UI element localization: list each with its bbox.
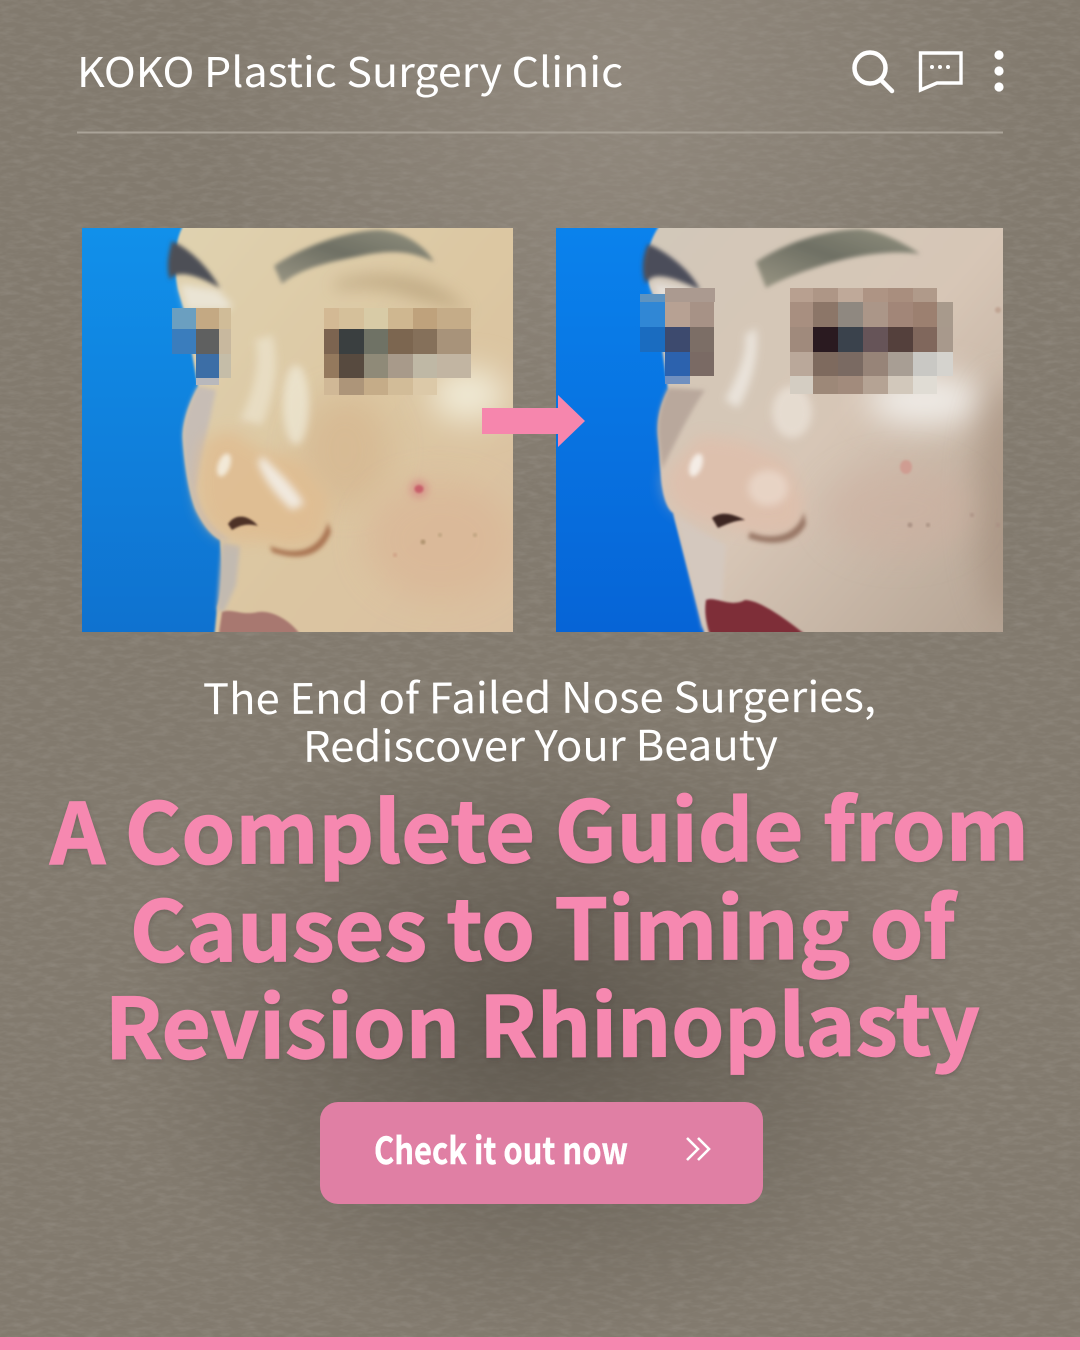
far eye white — [180, 284, 232, 310]
lips — [218, 610, 300, 632]
photo: before surgery — [82, 220, 520, 640]
nose tip tone — [666, 435, 805, 535]
right side cheek light — [430, 369, 506, 421]
main heading: Causes to Timing of — [130, 862, 959, 987]
far cheek sliver — [183, 386, 232, 540]
nose tip tone — [198, 430, 330, 548]
mosaic: left far eye — [640, 288, 715, 384]
main heading: Revision Rhinoplasty — [105, 959, 980, 1084]
subtitle: The End of Failed Nose Surgeries, — [203, 664, 876, 727]
mosaic: right eye — [790, 288, 953, 394]
nose crease — [270, 522, 331, 557]
blemish — [410, 480, 428, 498]
upper eyelid crease — [335, 274, 470, 312]
lips — [705, 599, 812, 640]
nose crease — [748, 512, 806, 543]
mosaic: left far eye — [172, 308, 231, 385]
header title: KOKO Plastic Surgery Clinic — [77, 39, 623, 99]
far eyebrow — [168, 241, 220, 288]
mosaic: right eye — [324, 308, 471, 395]
subtitle — [203, 664, 876, 775]
nostril — [228, 517, 258, 530]
nose highlights — [725, 328, 757, 408]
icon: chat bubble — [920, 53, 961, 90]
blemishes — [900, 460, 912, 474]
right side shade — [975, 380, 1035, 620]
main heading — [49, 764, 1029, 1084]
bottom accent bar — [0, 1337, 1080, 1350]
eyebrow — [756, 229, 920, 288]
nose highlights — [240, 335, 276, 425]
under eye highlight — [867, 374, 983, 426]
far eye white — [647, 281, 689, 294]
icon: search — [854, 52, 892, 91]
button: check it out now — [320, 1102, 763, 1204]
button: check it out now: Check it out now — [374, 1121, 628, 1175]
photo: after surgery — [556, 228, 1003, 632]
far cheek sliver — [658, 388, 705, 470]
face skin — [175, 220, 520, 640]
nostril — [712, 514, 745, 528]
arrow: before to after — [482, 395, 585, 447]
nose side shadow — [306, 401, 384, 498]
eyebrow — [274, 230, 434, 284]
face skin — [647, 220, 1010, 640]
main heading: A Complete Guide from — [49, 764, 1029, 889]
far eyebrow — [643, 244, 700, 290]
icon: double chevron — [687, 1138, 709, 1160]
cheek warmth — [380, 494, 484, 576]
header divider — [77, 132, 1003, 134]
subtitle: Rediscover Your Beauty — [303, 712, 778, 775]
icon: more menu — [994, 50, 1004, 92]
